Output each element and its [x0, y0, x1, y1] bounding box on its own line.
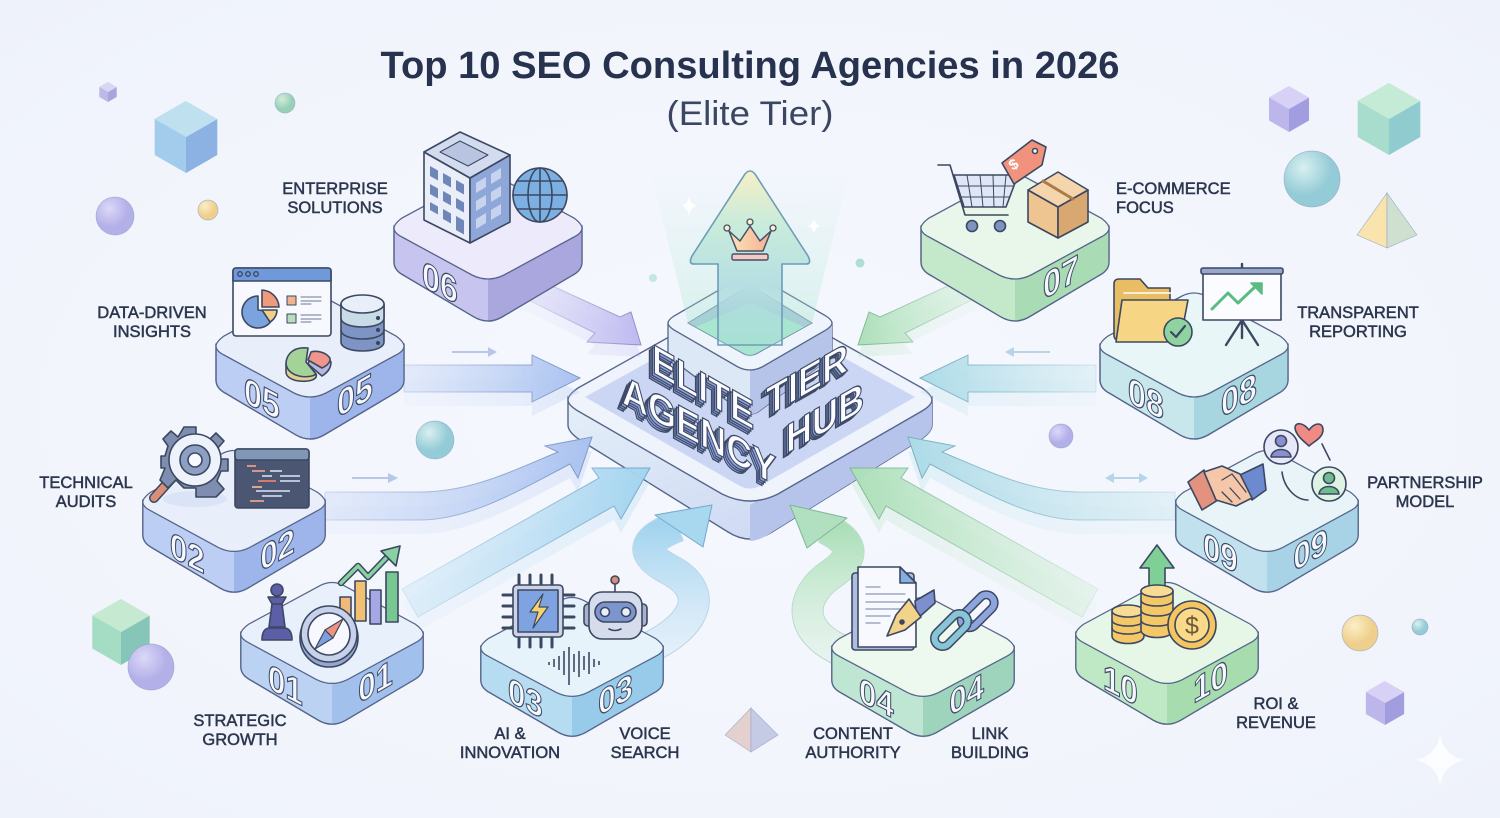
light beam — [650, 170, 850, 357]
label: technical audits: TECHNICAL — [39, 474, 133, 492]
icon: robot — [584, 576, 647, 639]
panel: 01 strategic growth: 01 — [358, 651, 393, 712]
panel: 03 ai and voice search: 03 — [508, 670, 543, 727]
label: technical audits: AUDITS — [56, 493, 116, 511]
label: content authority: CONTENT — [813, 725, 893, 743]
panel: 01 strategic growth: 01 — [268, 656, 303, 714]
hub upper block — [668, 276, 832, 414]
panel: 05 data-driven insights: 05 — [337, 363, 373, 426]
hub text: elite tier agency hub: HUB — [782, 376, 861, 466]
icon: fountain pen — [887, 590, 935, 636]
icon: globe — [513, 168, 567, 222]
arrow: 03 to hub — [640, 505, 712, 652]
hub text: elite tier agency hub: AGENCY — [622, 366, 776, 494]
arrow: 04 to hub — [790, 505, 860, 657]
hub text: elite tier agency hub: TIER — [761, 339, 843, 431]
icon: crown — [724, 219, 776, 260]
label: link building: LINK — [972, 725, 1008, 743]
label: e-commerce focus: FOCUS — [1116, 199, 1174, 217]
panel: 08 transparent reporting: 08 — [1128, 369, 1164, 429]
icon: price tag: $ — [1006, 155, 1023, 174]
arrow: 06 to hub — [520, 272, 641, 357]
hub text: elite tier agency hub: HUB — [784, 375, 862, 465]
panel: 02 technical audits: 02 — [170, 524, 205, 582]
panel: 06 enterprise solutions — [394, 132, 582, 322]
icon: chain link — [931, 591, 998, 650]
arrow: 05 to hub — [404, 355, 580, 416]
label: roi and revenue: ROI & — [1254, 695, 1298, 713]
arrow: 07 to hub — [858, 272, 980, 357]
arrow: 01 to hub — [402, 468, 650, 631]
label: partnership model: MODEL — [1396, 493, 1454, 511]
hub text: elite tier agency hub: AGENCY — [620, 368, 774, 496]
label: data-driven insights: INSIGHTS — [113, 323, 191, 341]
label: transparent reporting: REPORTING — [1309, 323, 1407, 341]
hub text: elite tier agency hub: TIER — [762, 337, 845, 429]
label: strategic growth: STRATEGIC — [193, 712, 287, 730]
sparkles — [649, 196, 864, 282]
hub text: elite tier agency hub: TIER — [766, 334, 848, 426]
label: partnership model: PARTNERSHIP — [1367, 474, 1483, 492]
label: ai and innovation: AI & — [494, 725, 526, 743]
panel: 05 data-driven insights — [216, 268, 404, 440]
label: voice search: VOICE — [619, 725, 671, 743]
arrow: 09 to hub — [908, 437, 1175, 534]
subtitle: (Elite Tier) — [666, 95, 834, 133]
panel: 07 e-commerce focus: 07 — [1043, 245, 1079, 308]
icon: code window — [235, 449, 309, 508]
icon: cardboard box — [1028, 172, 1088, 238]
panel: 04 content and links: 04 — [859, 670, 894, 727]
panel: 04 content and links — [832, 567, 1014, 737]
title: Top 10 SEO Consulting Agencies in 2026 — [380, 45, 1120, 87]
icon: sound wave — [549, 647, 599, 685]
label: enterprise solutions: ENTERPRISE — [282, 180, 388, 198]
hub text: elite tier agency hub: ELITE — [650, 337, 752, 441]
icon: compass — [300, 606, 358, 667]
arrow: 08 to hub — [920, 355, 1096, 416]
icon: check badge — [1164, 318, 1192, 346]
hub text: elite tier agency hub: TIER — [764, 336, 846, 428]
panel: 09 partnership model: 09 — [1203, 524, 1238, 582]
label: data-driven insights: DATA-DRIVEN — [97, 304, 207, 322]
panel: 08 transparent reporting — [1100, 264, 1288, 440]
panel: 02 technical audits — [143, 427, 325, 593]
icon: presentation board — [1201, 264, 1283, 345]
icon: up arrow — [690, 171, 810, 345]
arrow: 02 to hub — [325, 437, 592, 534]
label: strategic growth: GROWTH — [202, 731, 278, 749]
icon: office building — [424, 132, 510, 243]
hub text: elite tier agency hub: HUB — [781, 378, 859, 468]
hub text: elite tier agency hub: ELITE — [652, 335, 754, 439]
icon: shopping cart — [938, 165, 1018, 232]
icon: dollar coin: $ — [1185, 612, 1199, 640]
panel: 03 ai and voice search — [481, 575, 663, 737]
central hub — [568, 170, 932, 541]
panel: 05 data-driven insights: 05 — [244, 369, 280, 429]
icon: gear magnifier — [154, 427, 228, 507]
arrow: 10 to hub — [850, 468, 1098, 631]
label: ai and innovation: INNOVATION — [460, 744, 560, 762]
label: content authority: AUTHORITY — [805, 744, 901, 762]
panel: 04 content and links: 04 — [949, 665, 984, 724]
hub text: elite tier agency hub: ELITE — [648, 339, 751, 443]
label: roi and revenue: REVENUE — [1236, 714, 1316, 732]
panel: 02 technical audits: 02 — [260, 519, 295, 580]
small flow arrows — [352, 347, 1148, 483]
icon: database — [341, 295, 384, 351]
icon: handshake — [1188, 464, 1266, 510]
icon: ai chip — [503, 575, 574, 647]
icon: dollar coin — [1168, 601, 1216, 649]
decorative shapes — [92, 82, 1464, 785]
panel: 03 ai and voice search: 03 — [598, 665, 633, 724]
panel: 08 transparent reporting: 08 — [1221, 363, 1257, 426]
hub text: elite tier agency hub — [617, 334, 864, 499]
hub text: elite tier agency hub: HUB — [786, 373, 864, 463]
panel: 10 roi and revenue: 10 — [1103, 656, 1138, 714]
hub text: elite tier agency hub: AGENCY — [618, 369, 773, 498]
icon: coin stacks — [1112, 585, 1173, 644]
icon: document — [852, 567, 916, 650]
icon: price tag — [1002, 140, 1046, 184]
panel: 10 roi and revenue — [1076, 545, 1258, 725]
panel: 09 partnership model: 09 — [1293, 519, 1328, 580]
icon: 3d pie chart — [286, 348, 331, 381]
label: enterprise solutions: SOLUTIONS — [287, 199, 383, 217]
icon: up arrow — [1140, 545, 1174, 590]
label: voice search: SEARCH — [611, 744, 679, 762]
hub text: elite tier agency hub: ELITE — [647, 340, 749, 444]
label: transparent reporting: TRANSPARENT — [1297, 304, 1419, 322]
label: e-commerce focus: E-COMMERCE — [1116, 180, 1231, 198]
panel: 06 enterprise solutions: 06 — [422, 253, 458, 313]
hub base — [568, 296, 932, 541]
panel: 10 roi and revenue: 10 — [1193, 651, 1228, 712]
label: link building: BUILDING — [951, 744, 1029, 762]
panel: 09 partnership model — [1176, 424, 1358, 593]
icon: dashboard window — [233, 268, 331, 336]
icon: people cycle — [1264, 424, 1346, 501]
icon: growth bars — [340, 546, 400, 624]
hub text: elite tier agency hub: AGENCY — [617, 371, 771, 499]
icon: chess piece — [262, 584, 292, 640]
icon: folder — [1114, 279, 1188, 342]
panel: 01 strategic growth — [241, 546, 423, 725]
panel: 07 e-commerce focus — [921, 140, 1109, 322]
